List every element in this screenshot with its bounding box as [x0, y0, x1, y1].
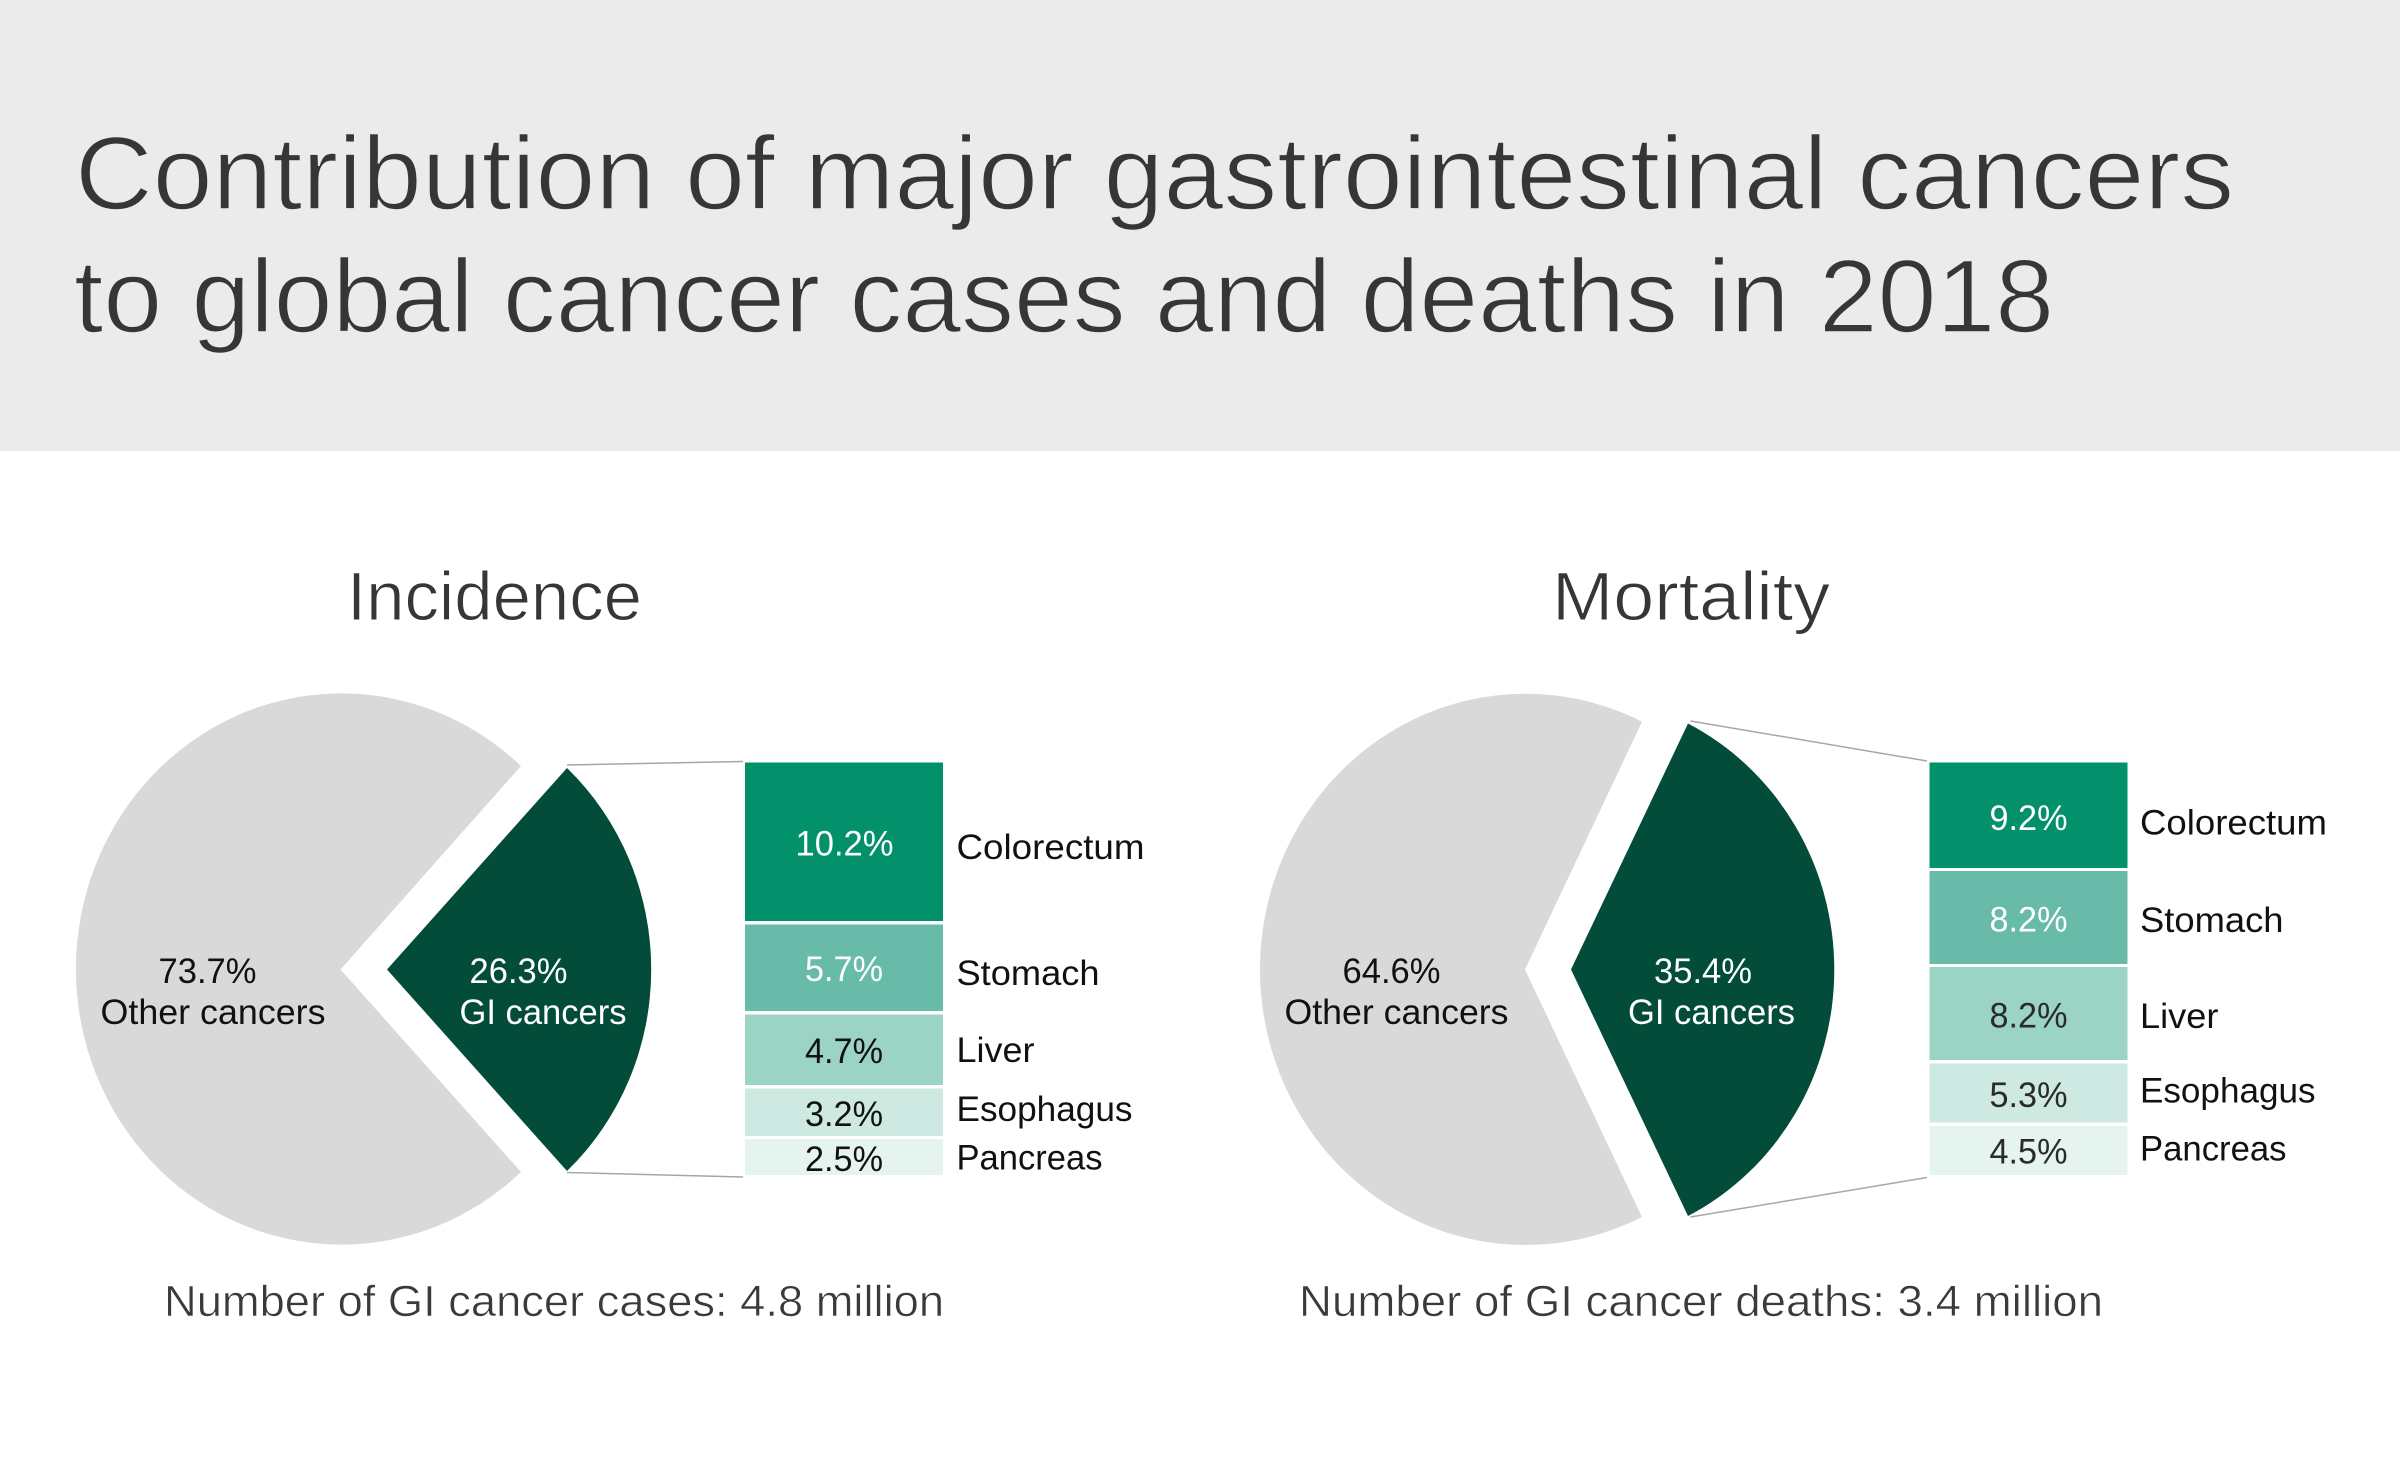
title: to global cancer cases and deaths in 2018: [74, 239, 2054, 355]
bar segment: esophagus: 3.2%: [805, 1095, 883, 1134]
bar segment: pancreas: Pancreas: [956, 1138, 1102, 1178]
bar segment: pancreas: [1930, 1126, 2286, 1175]
bar segment: colorectum: Colorectum: [2140, 804, 2327, 842]
bar segment: pancreas: Pancreas: [2140, 1130, 2286, 1168]
bar segment: stomach: [745, 924, 1100, 1011]
pie slice: GI cancers 35.4%: GI cancers: [1628, 993, 1795, 1032]
bar segment: liver: [745, 1014, 1035, 1085]
bar segment: liver: [1930, 967, 2219, 1060]
pie slice: other cancers 73.7%: Other cancers: [100, 993, 326, 1032]
bar segment: stomach: 8.2%: [1990, 900, 2068, 940]
bar segment: pancreas: 2.5%: [805, 1140, 883, 1179]
pie slice: other cancers 73.7%: [76, 693, 521, 1245]
bar segment: colorectum: 10.2%: [796, 824, 894, 864]
header panel: [0, 0, 2400, 451]
title: Contribution of major gastrointestinal cancers: [75, 116, 2234, 232]
pie slice: GI cancers 26.3%: [387, 768, 651, 1171]
stacked bar: mortality by site: [1930, 762, 2327, 1175]
pie slice: GI cancers 26.3%: GI cancers: [460, 993, 626, 1032]
connector lines: [567, 762, 743, 1177]
bar segment: liver: Liver: [2140, 997, 2219, 1036]
caption: number of deaths: Number of GI cancer deaths: 3.4 million: [1299, 1277, 2103, 1326]
bar segment: colorectum: Colorectum: [956, 828, 1144, 867]
bar segment: stomach: Stomach: [2140, 901, 2284, 940]
bar segment: colorectum: [745, 762, 1144, 921]
pie slice: other cancers 64.6%: Other cancers: [1284, 993, 1508, 1032]
bar segment: esophagus: 5.3%: [1990, 1076, 2068, 1115]
bar segment: esophagus: Esophagus: [956, 1090, 1132, 1129]
bar segment: stomach: [1930, 871, 2284, 964]
bar segment: liver: 8.2%: [1990, 996, 2068, 1036]
bar segment: esophagus: [1930, 1064, 2316, 1122]
panel: mortality: [1260, 558, 2327, 1326]
bar segment: colorectum: 9.2%: [1990, 799, 2068, 838]
pie slice: GI cancers 26.3%: 26.3%: [470, 952, 568, 991]
bar segment: colorectum: [1930, 762, 2327, 868]
pie slice: other cancers 64.6%: [1260, 694, 1642, 1245]
pie slice: other cancers 64.6%: 64.6%: [1342, 952, 1440, 991]
bar segment: pancreas: [745, 1138, 1102, 1179]
bar segment: liver: Liver: [956, 1031, 1035, 1070]
heading: mortality: Mortality: [1552, 558, 1831, 635]
bar segment: esophagus: Esophagus: [2140, 1072, 2316, 1110]
caption: number of cases: Number of GI cancer cases: 4.8 million: [164, 1277, 944, 1326]
bar segment: stomach: 5.7%: [805, 950, 883, 989]
heading: incidence: Incidence: [347, 558, 642, 635]
panel: incidence: [76, 558, 1144, 1326]
bar segment: pancreas: 4.5%: [1990, 1132, 2068, 1172]
connector lines: [1690, 721, 1927, 1217]
pie slice: GI cancers 35.4%: 35.4%: [1654, 952, 1752, 991]
bar segment: esophagus: [745, 1088, 1132, 1136]
pie slice: other cancers 73.7%: 73.7%: [158, 952, 256, 991]
title: [74, 116, 2234, 355]
bar segment: stomach: Stomach: [956, 954, 1100, 993]
pie slice: GI cancers 35.4%: [1571, 724, 1834, 1216]
bar segment: liver: 4.7%: [805, 1032, 883, 1071]
stacked bar: incidence by site: [745, 762, 1144, 1179]
